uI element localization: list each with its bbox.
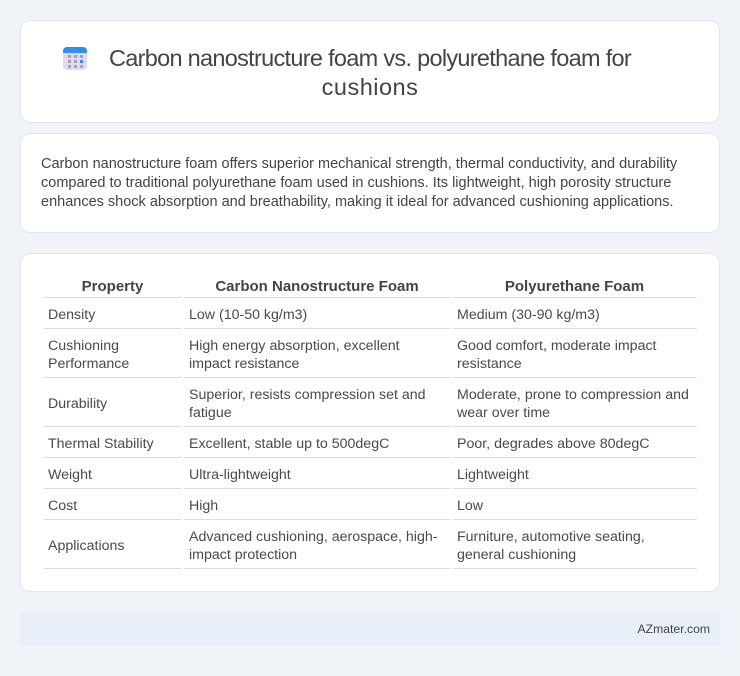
row: cushioning performance: impact resistance bbox=[189, 356, 299, 372]
title: Carbon nanostructure foam vs. polyurethane foam for bbox=[109, 45, 631, 71]
row: durability bbox=[48, 387, 689, 421]
row: applications: general cushioning bbox=[457, 547, 576, 563]
row: weight: Weight bbox=[48, 467, 92, 483]
row: cushioning performance: resistance bbox=[457, 356, 522, 372]
table header bbox=[82, 278, 644, 295]
row: cushioning performance: Good comfort, moderate impact bbox=[457, 338, 656, 354]
row: durability: wear over time bbox=[457, 405, 550, 421]
row: density bbox=[48, 307, 600, 323]
row: density: Low (10-50 kg/m3) bbox=[189, 307, 307, 323]
row: durability: Moderate, prone to compression and bbox=[457, 387, 689, 403]
row: weight: Lightweight bbox=[457, 467, 529, 483]
row: cost: Cost bbox=[48, 498, 77, 514]
footer bar bbox=[20, 612, 720, 646]
row: cushioning performance: Cushioning bbox=[48, 338, 119, 354]
icon: calendar bbox=[63, 47, 87, 70]
row: weight bbox=[48, 467, 529, 483]
row: applications bbox=[48, 529, 645, 563]
row: applications: impact protection bbox=[189, 547, 297, 563]
row: applications: Applications bbox=[48, 538, 125, 554]
row: durability: fatigue bbox=[189, 405, 232, 421]
table header: Carbon Nanostructure Foam bbox=[215, 278, 419, 295]
row: durability: Superior, resists compression set and bbox=[189, 387, 426, 403]
footer source text: AZmater.com bbox=[638, 622, 710, 636]
intro paragraph: enhances shock absorption and breathability, making it ideal for advanced cushioning applications. bbox=[41, 194, 674, 210]
table header: Property bbox=[82, 278, 143, 295]
comparison table bbox=[43, 278, 697, 569]
title card bbox=[20, 20, 720, 123]
panel: comparison table bbox=[20, 253, 720, 592]
row: density: Medium (30-90 kg/m3) bbox=[457, 307, 600, 323]
title bbox=[109, 45, 632, 100]
row: density: Density bbox=[48, 307, 95, 323]
row: thermal stability: Excellent, stable up to 500degC bbox=[189, 436, 389, 452]
row: cushioning performance: High energy absorption, excellent bbox=[189, 338, 400, 354]
row: cost bbox=[48, 498, 483, 514]
row: cost: High bbox=[189, 498, 218, 514]
row: cushioning performance bbox=[48, 338, 656, 372]
title: cushions bbox=[322, 74, 418, 100]
panel: intro text bbox=[20, 133, 720, 233]
table header: Polyurethane Foam bbox=[505, 278, 644, 295]
row: cushioning performance: Performance bbox=[48, 356, 129, 372]
intro paragraph: compared to traditional polyurethane foam used in cushions. Its lightweight, high porosity structure bbox=[41, 175, 671, 191]
intro paragraph: Carbon nanostructure foam offers superior mechanical strength, thermal conductivity, and durability bbox=[41, 156, 677, 172]
row: cost: Low bbox=[457, 498, 483, 514]
row: applications: Advanced cushioning, aerospace, high- bbox=[189, 529, 437, 545]
row: thermal stability bbox=[48, 436, 649, 452]
row: weight: Ultra-lightweight bbox=[189, 467, 291, 483]
row: durability: Durability bbox=[48, 396, 107, 412]
intro paragraph bbox=[41, 156, 678, 210]
row: thermal stability: Poor, degrades above 80degC bbox=[457, 436, 649, 452]
row: applications: Furniture, automotive seating, bbox=[457, 529, 645, 545]
row: thermal stability: Thermal Stability bbox=[48, 436, 154, 452]
